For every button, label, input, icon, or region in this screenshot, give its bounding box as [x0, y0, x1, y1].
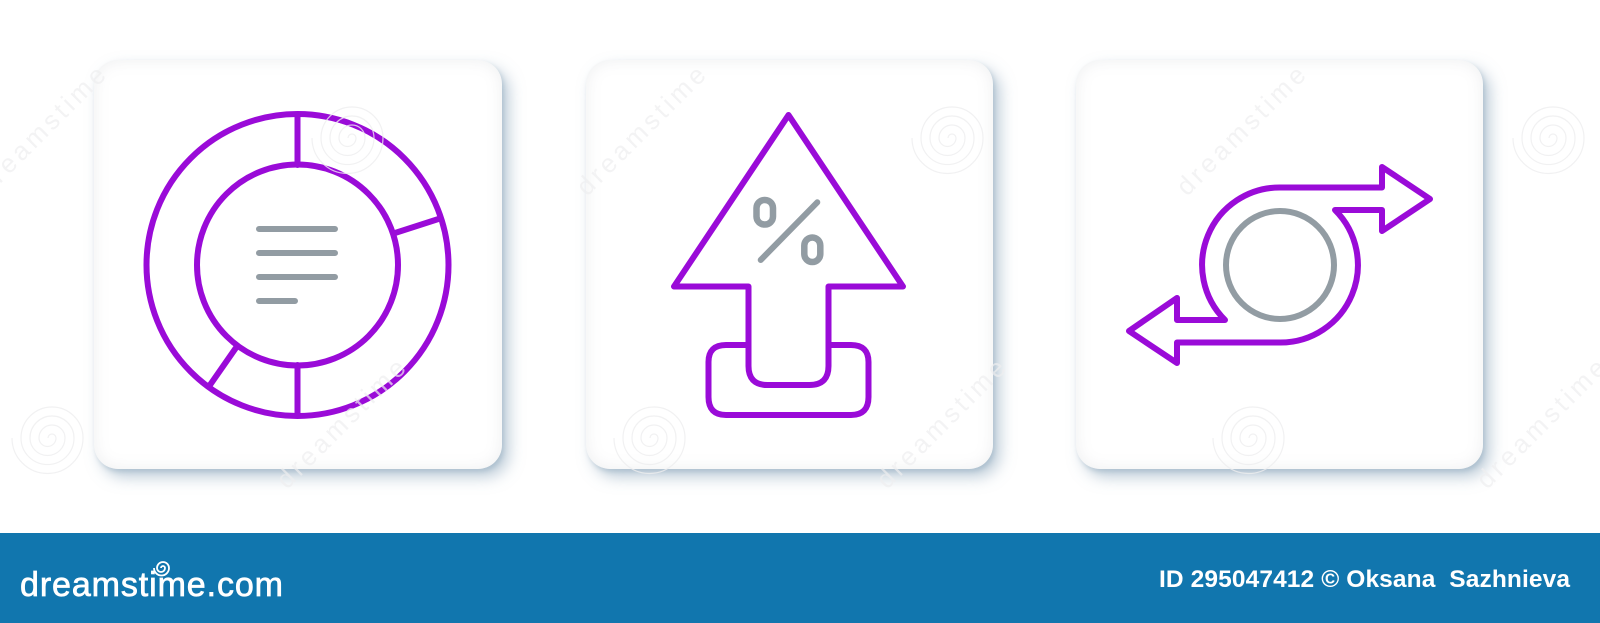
icon: logo spiral	[154, 562, 169, 576]
panel: donut chart card	[94, 60, 502, 469]
image ID and author credit: ID 295047412 © Oksana Sazhnieva	[1159, 566, 1570, 593]
icon: donut chart with text lines	[144, 111, 452, 419]
logo text: dreamstime.com	[20, 566, 283, 604]
footer band	[0, 533, 1600, 623]
watermark overlay: dreamstime	[270, 353, 411, 494]
watermark overlay: dreamstime	[1170, 60, 1311, 201]
icon: bidirectional arrow looping around a circle	[1126, 164, 1433, 366]
icon: up arrow with percent sign over a tray	[671, 112, 906, 418]
watermark overlay: dreamstime	[570, 60, 711, 201]
watermark overlay: dreamstime	[870, 353, 1011, 494]
panel: percent up arrow card	[586, 60, 993, 469]
panel: two-way arrows around circle card	[1076, 60, 1483, 469]
